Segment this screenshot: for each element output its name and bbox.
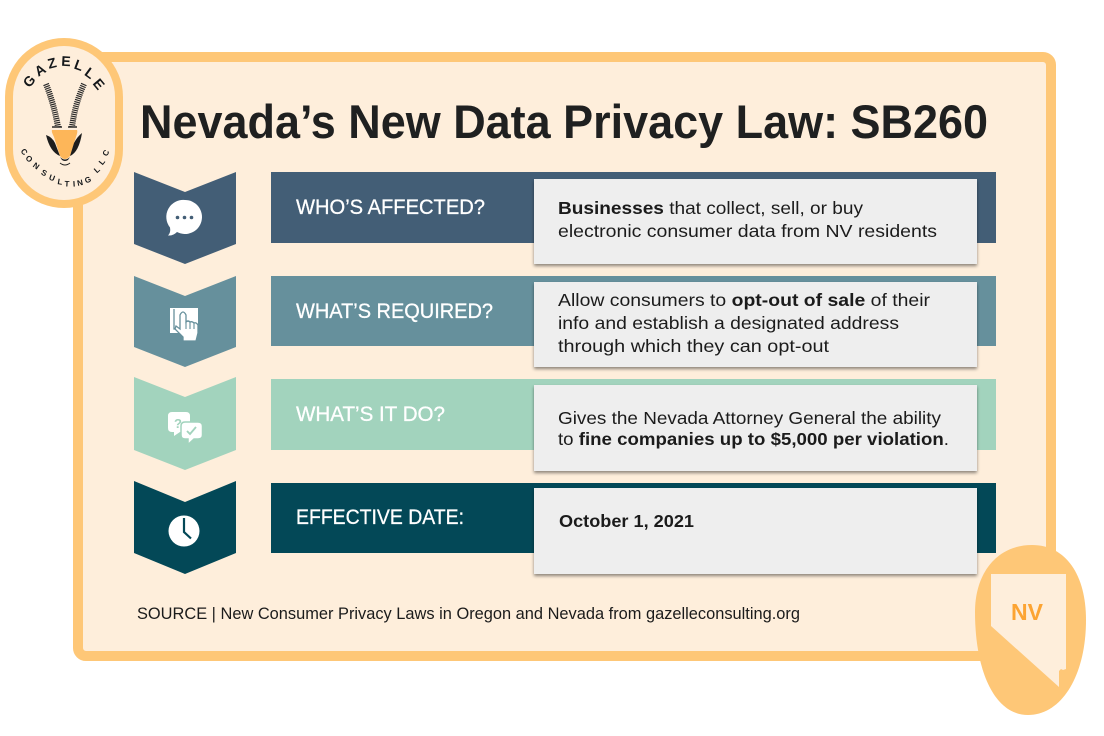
logo wordmark top: L — [72, 56, 86, 74]
Nevada badge — [975, 545, 1086, 715]
card: Businesses that collect, sell, or buy — [558, 198, 863, 218]
icon: clock — [168, 516, 200, 546]
source line: SOURCE | New Consumer Privacy Laws in Oregon and Nevada from gazelleconsulting.org — [137, 605, 800, 623]
logo wordmark bottom: L — [57, 177, 63, 187]
logo wordmark bottom: N — [31, 161, 41, 171]
row: effective date — [134, 481, 996, 574]
logo wordmark bottom: G — [83, 175, 93, 185]
bar — [271, 483, 996, 553]
logo wordmark bottom: U — [48, 173, 56, 183]
logo wordmark top: G — [19, 72, 39, 90]
logo wordmark top: E — [61, 53, 71, 69]
state label: NV — [1011, 599, 1044, 625]
row: what's it do — [134, 377, 996, 471]
bar — [271, 379, 996, 450]
card: Allow consumers to opt-out of sale of their — [558, 290, 930, 310]
logo wordmark bottom: S — [40, 168, 49, 179]
background panel — [78, 57, 1051, 656]
card — [534, 179, 977, 264]
chevron — [134, 172, 236, 264]
row: who's affected — [134, 172, 996, 264]
logo wordmark top: A — [31, 61, 49, 79]
logo wordmark top: Z — [46, 54, 59, 72]
card: Gives the Nevada Attorney General the ability — [558, 408, 941, 428]
icon: hand on book — [170, 308, 198, 341]
logo wordmark top: L — [82, 64, 99, 82]
icon: question and check bubbles — [168, 412, 202, 444]
logo wordmark bottom: I — [73, 179, 75, 189]
logo wordmark bottom — [19, 147, 111, 189]
logo badge — [5, 38, 123, 208]
card — [534, 488, 977, 574]
logo wordmark bottom: O — [24, 154, 34, 164]
bar — [271, 276, 996, 346]
heading: EFFECTIVE DATE: — [296, 505, 464, 529]
logo wordmark bottom: N — [76, 178, 84, 188]
icon: speech bubble — [166, 200, 202, 236]
logo wordmark bottom: T — [64, 179, 70, 189]
heading: WHAT’S IT DO? — [296, 402, 445, 426]
chevron — [134, 481, 236, 574]
logo wordmark bottom: C — [19, 147, 29, 157]
chevron — [134, 377, 236, 470]
icon: gazelle head — [46, 84, 84, 165]
heading: WHO’S AFFECTED? — [296, 195, 485, 219]
state outline — [991, 574, 1066, 687]
row: what's required — [134, 276, 996, 367]
logo wordmark bottom: L — [97, 157, 107, 167]
card — [534, 385, 977, 471]
card: through which they can opt-out — [558, 336, 829, 356]
heading: WHAT’S REQUIRED? — [296, 299, 493, 323]
card: October 1, 2021 — [559, 511, 694, 531]
title: Nevada’s New Data Privacy Law: SB260 — [140, 95, 988, 148]
chevron — [134, 276, 236, 367]
card: to fine companies up to $5,000 per violation . — [558, 429, 949, 449]
logo wordmark top — [19, 53, 108, 93]
card — [534, 282, 977, 367]
logo wordmark bottom: L — [92, 165, 102, 175]
logo wordmark bottom: C — [101, 148, 111, 158]
bar — [271, 172, 996, 243]
icon: question and check bubbles: ? — [174, 416, 182, 431]
logo wordmark top: E — [90, 75, 108, 93]
card: electronic consumer data from NV residents — [558, 221, 937, 241]
card: info and establish a designated address — [558, 313, 899, 333]
